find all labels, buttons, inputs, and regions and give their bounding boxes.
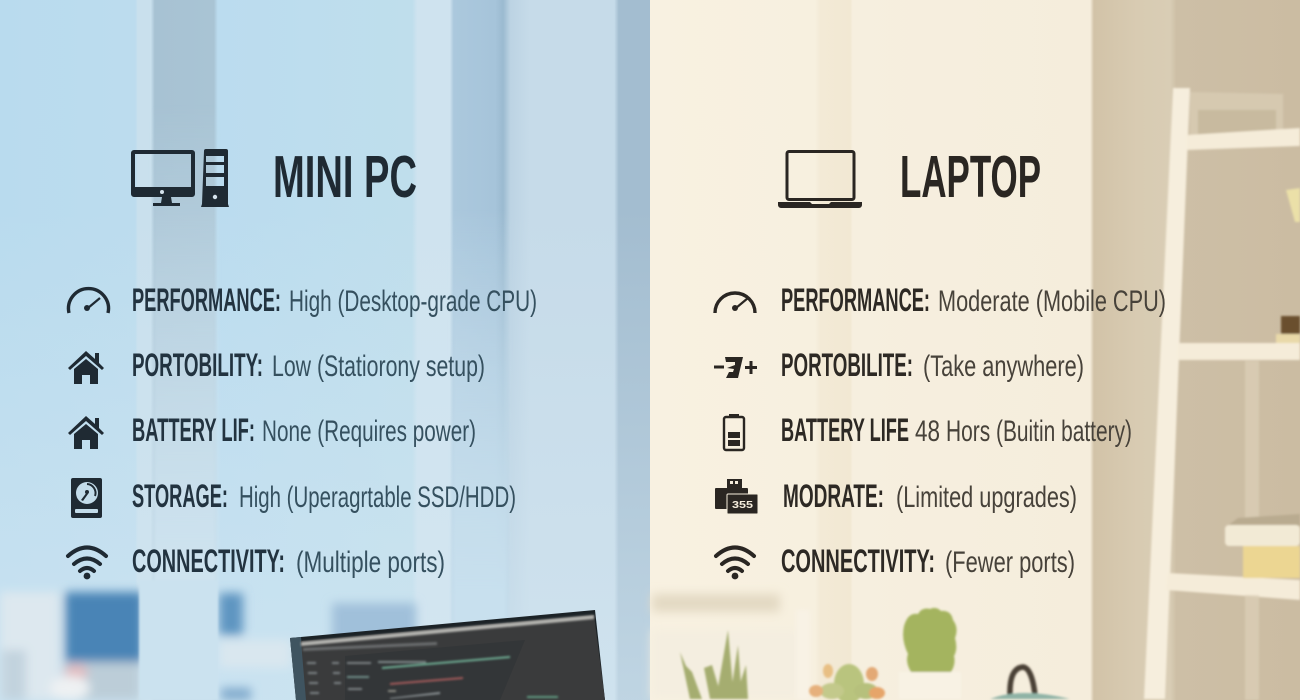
books on shelf — [1226, 514, 1300, 527]
panel: mini PC background — [0, 0, 650, 700]
label: performance: PERFORMANCE: — [781, 282, 930, 318]
icon: hard drive — [71, 478, 102, 518]
value: portability: (Take anywhere) — [923, 350, 1084, 383]
ladder shelf — [1144, 88, 1300, 700]
icon: SSD and drive: 355 — [732, 500, 754, 511]
panel: laptop background — [650, 0, 1300, 700]
backpack with handle — [990, 667, 1070, 699]
label: storage: MODRATE: — [783, 478, 884, 514]
heading: MINI PC: MINI PC — [273, 144, 417, 210]
row: mini PC connectivity — [68, 543, 445, 579]
label: portability: PORTOBILITY: — [132, 347, 263, 383]
row: laptop portability — [714, 347, 1084, 383]
icon: laptop — [778, 152, 862, 208]
value: performance: Moderate (Mobile CPU) — [938, 285, 1166, 318]
row: laptop performance — [715, 282, 1166, 318]
icon: house — [68, 416, 104, 449]
icon: desktop monitor and tower — [131, 149, 229, 207]
row: mini PC performance — [68, 282, 537, 318]
label: storage: STORAGE: — [132, 478, 228, 514]
heading group: laptop — [778, 144, 1041, 210]
label: connectivity: CONNECTIVITY: — [781, 543, 935, 579]
monitor with code editor — [290, 610, 605, 700]
plant: grass — [680, 630, 748, 699]
near pillar over skyline — [139, 580, 218, 700]
label: connectivity: CONNECTIVITY: — [132, 543, 285, 579]
row: mini PC storage — [71, 478, 516, 518]
value: battery: None (Requires power) — [262, 415, 476, 448]
row: laptop connectivity — [716, 543, 1075, 579]
row: laptop storage — [715, 478, 1077, 514]
heading: LAPTOP: LAPTOP — [900, 144, 1041, 210]
value: storage: (Limited upgrades) — [896, 481, 1077, 514]
value: performance: High (Desktop-grade CPU) — [289, 285, 537, 318]
icon: wifi — [68, 548, 106, 579]
icon: house — [68, 351, 104, 384]
plant: potted cactus — [899, 608, 961, 699]
blurred city skyline — [0, 592, 416, 700]
value: battery note: Hors (Buitin battery) — [946, 415, 1132, 448]
row: laptop battery — [724, 412, 1132, 450]
icon: battery — [724, 414, 744, 450]
label: performance: PERFORMANCE: — [132, 282, 281, 318]
label: portability: PORTOBILITE: — [781, 347, 913, 383]
row: mini PC battery — [68, 412, 476, 449]
icon: wifi — [716, 548, 754, 579]
label: battery: BATTERY LIF: — [132, 412, 255, 448]
blurred window — [652, 594, 802, 698]
value: connectivity: (Multiple ports) — [296, 546, 445, 579]
value: battery hours: 48 — [915, 415, 940, 448]
value: portability: Low (Statiorony setup) — [272, 350, 485, 383]
icon: gauge — [715, 293, 755, 313]
icon: gauge — [68, 289, 108, 313]
plant: flowering succulent — [809, 664, 885, 700]
heading group: mini PC — [131, 144, 417, 210]
label: battery: BATTERY LIFE — [781, 412, 909, 448]
value: connectivity: (Fewer ports) — [945, 546, 1075, 579]
value: storage: High (Uperagrtable SSD/HDD) — [239, 481, 516, 514]
icon: SSD and drive — [715, 479, 758, 514]
row: mini PC portability — [68, 347, 485, 384]
icon: portability glyph — [714, 357, 757, 378]
